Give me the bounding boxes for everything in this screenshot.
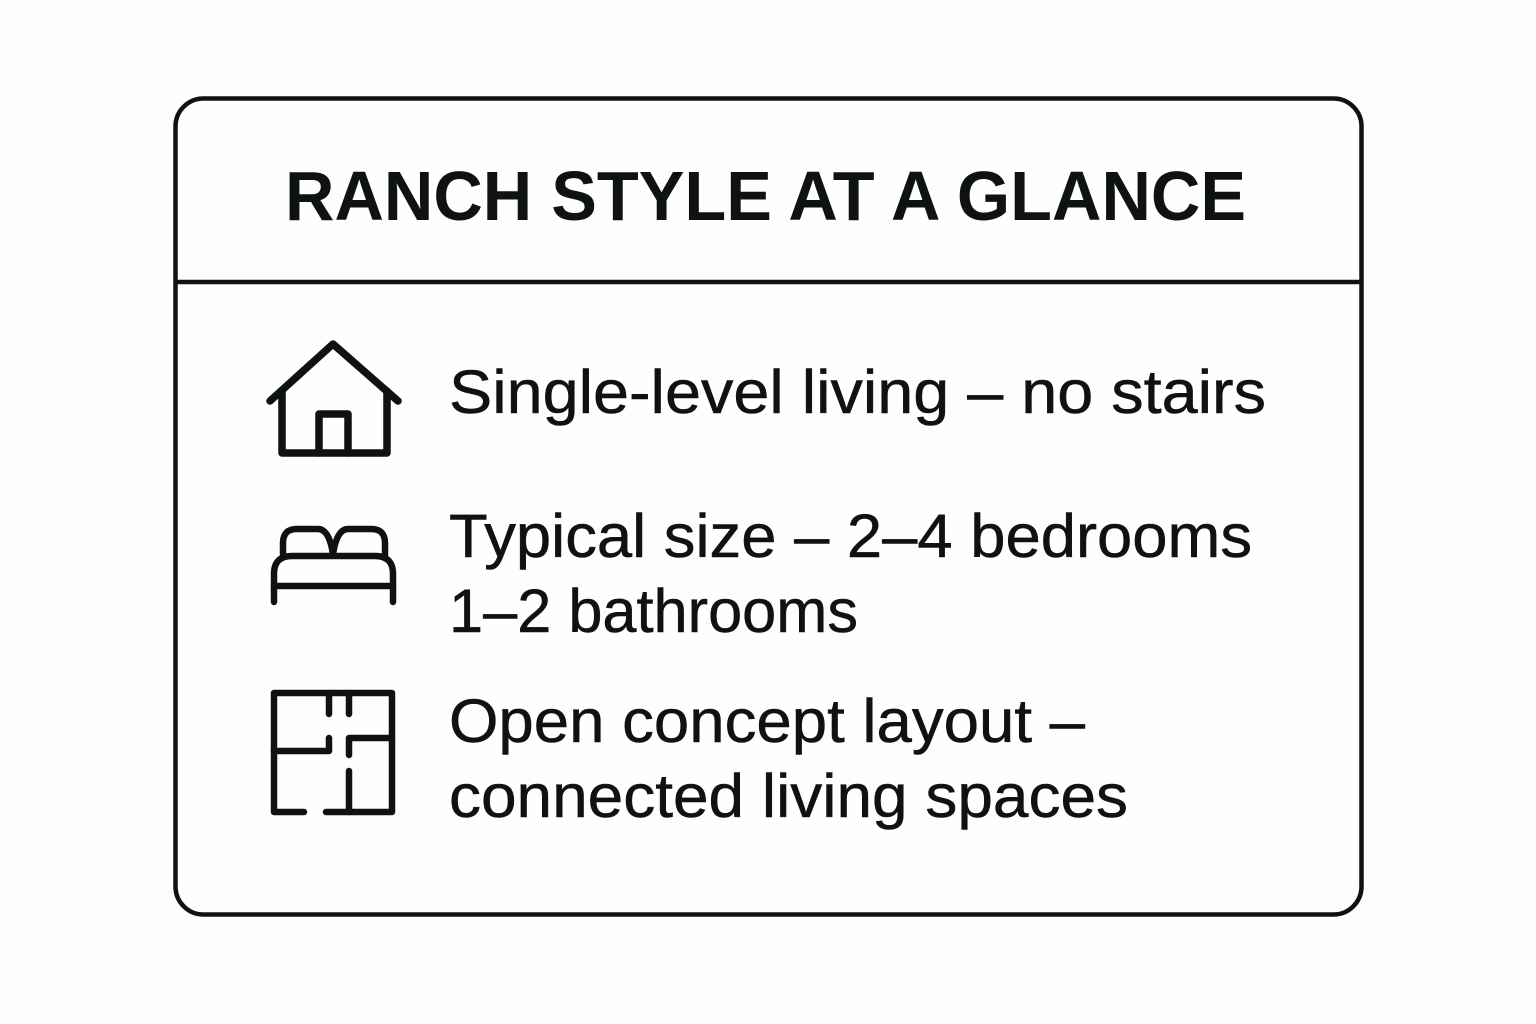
text: open concept layout: Open concept layout – <box>449 687 1085 755</box>
text: typical size: 1–2 bathrooms <box>449 577 858 645</box>
text: typical size: Typical size – 2–4 bedrooms <box>449 502 1252 570</box>
icon: floor plan <box>274 693 392 812</box>
icon: house <box>270 344 398 453</box>
text: open concept layout: connected living spaces <box>449 762 1128 830</box>
title: RANCH STYLE AT A GLANCE <box>285 157 1246 235</box>
text: open concept layout <box>449 687 1128 830</box>
text: typical size <box>449 502 1252 645</box>
icon: bed <box>274 529 393 602</box>
panel: card outline <box>176 98 1362 914</box>
text: single-level living: Single-level living – no stairs <box>449 358 1266 426</box>
